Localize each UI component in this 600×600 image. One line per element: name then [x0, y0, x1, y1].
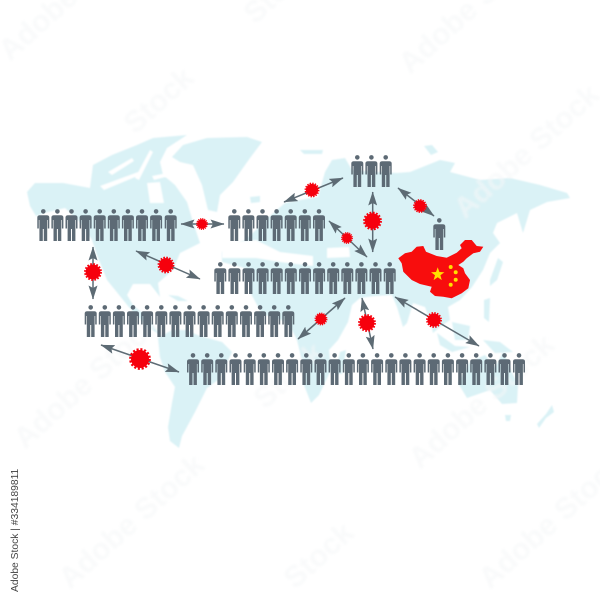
people top trio: [351, 155, 392, 187]
continent: North America: [27, 135, 200, 335]
virus icons: [85, 183, 441, 369]
people row 1: [37, 209, 177, 241]
map of China: [398, 240, 483, 298]
watermark: Stock: [118, 61, 201, 140]
continent: South America: [158, 330, 232, 448]
continent: Eurasia and Africa: [222, 158, 570, 403]
flag stars: [431, 265, 458, 287]
people row 5: [187, 353, 525, 385]
islands: [250, 145, 554, 428]
arctic channels and inland seas: [100, 150, 350, 304]
people row 2: [228, 209, 325, 241]
people row 3: [214, 262, 396, 294]
watermark: Stock: [278, 516, 361, 595]
person single: [433, 218, 445, 250]
people row 4: [85, 305, 294, 337]
arrows: [93, 178, 479, 372]
watermark: Adobe Stock: [403, 328, 561, 475]
stock id side text: Adobe Stock | #334189811: [10, 468, 21, 592]
world map: [27, 135, 570, 448]
watermark: Adobe Stock: [8, 308, 166, 455]
watermark: Stock: [248, 336, 331, 415]
continent: Greenland: [172, 137, 262, 212]
Cuba: [168, 295, 188, 301]
watermark: Adobe Stock: [53, 448, 211, 595]
